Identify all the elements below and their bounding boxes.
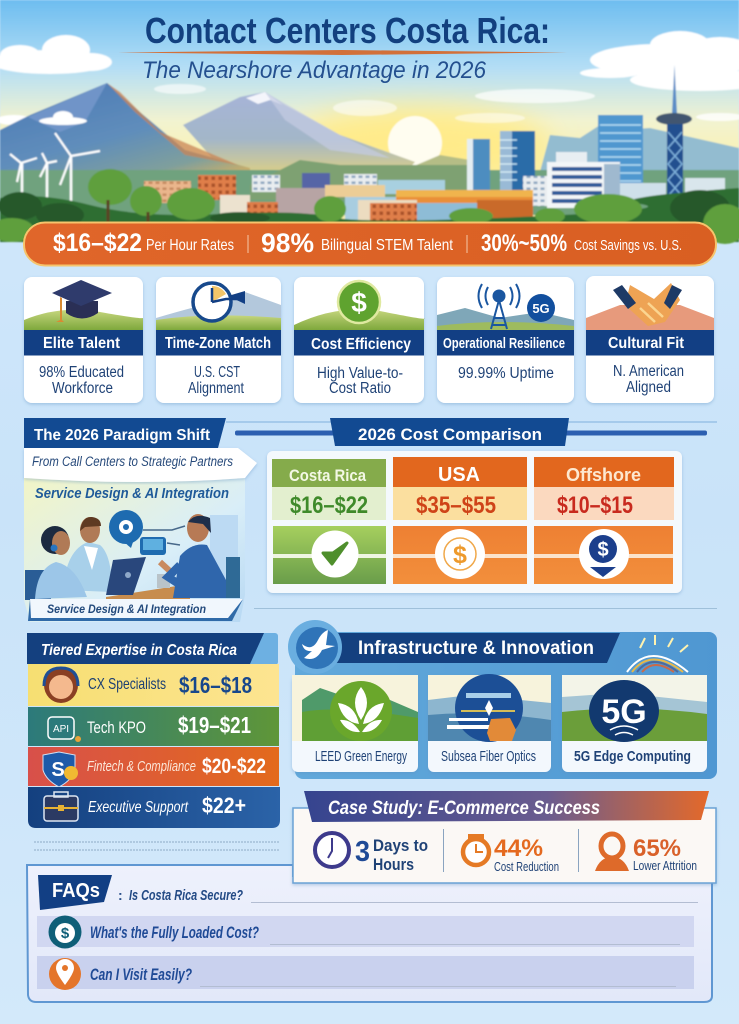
heading: paradigm shift (24, 418, 226, 448)
metric: days to hours: Hours (373, 855, 414, 874)
illustration panel: service design and AI: Service Design & AI Integration (35, 485, 229, 502)
icon: gear speech bubble (109, 510, 143, 548)
question: visit: Can I Visit Easily? (90, 965, 192, 984)
question: fully loaded cost: What's the Fully Loaded Cost? (90, 923, 259, 942)
panel: paradigm shift (24, 418, 257, 622)
key statistics banner: $16–$22 (53, 229, 142, 257)
card: Subsea Fiber Optics: Subsea Fiber Optics (441, 749, 536, 765)
question: fully loaded cost: $ (61, 925, 70, 942)
panel: infrastructure and innovation (288, 620, 717, 779)
icon: 5G badge (589, 680, 659, 742)
heading: cost comparison: 2026 Cost Comparison (358, 425, 542, 444)
tier: Tech KPO (28, 707, 279, 746)
subtitle: The Nearshore Advantage in 2026 (142, 57, 487, 84)
card: 5G Edge Computing (562, 675, 707, 772)
card: Cultural Fit (586, 276, 714, 403)
icon: rainbow arc (627, 635, 688, 672)
column: Costa Rica (272, 459, 386, 584)
column: Costa Rica: Costa Rica (289, 466, 366, 485)
caption strip (28, 599, 243, 621)
card: Cultural Fit: N. American (613, 363, 684, 380)
card: Time-Zone Match (156, 277, 281, 403)
metric: days to hours (315, 833, 428, 874)
metric: cost reduction: Cost Reduction (494, 859, 559, 874)
card: 5G Edge Computing: 5G Edge Computing (574, 749, 691, 765)
FAQ heading tag (38, 875, 112, 910)
tier: Fintech and Compliance: $20-$22 (202, 755, 266, 778)
card: Cost Efficiency: High Value-to- (317, 365, 403, 382)
card: Elite Talent: 98% Educated (39, 364, 124, 381)
question: security (118, 887, 698, 904)
card: Time-Zone Match: Alignment (188, 380, 245, 397)
icon: handshake (613, 283, 682, 326)
card: Subsea Fiber Optics (428, 674, 551, 772)
tier: Tech KPO: $19–$21 (178, 712, 251, 738)
tier: Tech KPO: API (53, 724, 69, 735)
infrastructure heading: Infrastructure & Innovation (358, 638, 594, 659)
column: Offshore: $10–$15 (557, 492, 633, 519)
metric: days to hours: 3 (355, 836, 370, 868)
tier: Executive Support (28, 787, 280, 828)
card: LEED Green Energy (292, 675, 418, 772)
metric: lower attrition (595, 834, 697, 873)
card: Time-Zone Match: U.S. CST (194, 364, 240, 381)
key statistics banner: Bilingual STEM Talent (321, 237, 453, 254)
panel: tiered expertise (27, 633, 280, 828)
card: LEED Green Energy: LEED Green Energy (315, 749, 408, 765)
key statistics banner: 30%~50% (481, 230, 567, 257)
person: agent with headset (35, 526, 87, 599)
icon: laptop (106, 557, 146, 595)
icon: dollar coin: $ (453, 541, 467, 569)
card: Elite Talent (24, 277, 143, 403)
case study banner: Case Study: E-Commerce Success (328, 798, 600, 819)
tier heading (27, 633, 278, 665)
tier: CX Specialists: $16–$18 (179, 672, 252, 698)
icon: dollar coin: $ (351, 287, 367, 318)
tier: Executive Support: $22+ (202, 793, 246, 818)
key statistics banner: Cost Savings vs. U.S. (574, 237, 682, 254)
panel: case study (293, 791, 716, 883)
icon: graduation cap (52, 280, 112, 322)
column: USA: USA (438, 464, 480, 486)
heading: cost comparison (235, 418, 707, 446)
case study banner (304, 791, 709, 822)
column: Costa Rica: $16–$22 (290, 492, 368, 519)
key statistics banner: 98% (261, 228, 314, 258)
card: Operational Resilience: 99.99% Uptime (458, 365, 554, 382)
icon: fiber globe (447, 674, 523, 742)
icon: clock (193, 283, 245, 321)
question: security: Is Costa Rica Secure? (129, 888, 243, 904)
tier heading: Tiered Expertise in Costa Rica (41, 642, 237, 659)
icon: dollar down: $ (597, 539, 609, 561)
metric: lower attrition: Lower Attrition (633, 858, 697, 873)
column: Offshore: Offshore (566, 465, 641, 485)
tier: Fintech and Compliance: Fintech & Compliance (87, 758, 196, 775)
card: Cost Efficiency: Cost Efficiency (311, 336, 411, 353)
tier: CX Specialists (28, 664, 279, 706)
card: Elite Talent: Workforce (52, 380, 113, 397)
card: Operational Resilience: Operational Resilience (443, 336, 565, 352)
column: USA (393, 457, 527, 584)
tier: Executive Support: Executive Support (88, 799, 188, 816)
illustration panel: service design and AI (24, 470, 245, 622)
caption strip: Service Design & AI Integration (47, 602, 206, 616)
key statistics banner: Per Hour Rates (146, 237, 234, 254)
title: Contact Centers Costa Rica: (145, 10, 550, 51)
cost comparison table (267, 451, 682, 593)
person: colleague (63, 517, 112, 592)
key statistics banner (24, 222, 716, 266)
icon: check mark (312, 530, 358, 578)
arrow banner: from call centers (24, 448, 257, 482)
question: visit (37, 956, 694, 990)
icon: bird badge (288, 620, 342, 674)
question: security: : (118, 887, 123, 903)
question: fully loaded cost (37, 916, 694, 948)
infrastructure heading (330, 633, 620, 663)
metric: cost reduction: 44% (494, 835, 543, 862)
card: Cultural Fit: Cultural Fit (608, 335, 685, 352)
icon: leaf (330, 681, 392, 741)
column: Offshore (534, 457, 674, 584)
heading: paradigm shift: The 2026 Paradigm Shift (34, 427, 210, 444)
card: Cultural Fit: Aligned (626, 379, 671, 396)
tier: Fintech and Compliance: S (51, 759, 65, 781)
arrow banner: from call centers: From Call Centers to Strategic Partners (32, 454, 233, 469)
card: Cost Efficiency: Cost Ratio (329, 380, 391, 397)
panel: FAQs (27, 865, 712, 1002)
card: Operational Resilience (437, 277, 574, 403)
tier: Fintech and Compliance (28, 747, 279, 787)
icon: tablet device (140, 526, 185, 555)
card: Cost Efficiency (294, 277, 425, 403)
column: USA: $35–$55 (416, 492, 496, 519)
tier: Tech KPO: Tech KPO (87, 718, 146, 737)
person: consultant (160, 514, 226, 598)
icon: signal tower with 5G: 5G (532, 301, 550, 316)
hero scene: mountains and skyline (0, 0, 739, 244)
metric: cost reduction (463, 834, 559, 874)
metric: days to hours: Days to (373, 836, 428, 855)
card: Elite Talent: Elite Talent (43, 335, 121, 352)
icon: 5G badge: 5G (601, 693, 647, 731)
tier: CX Specialists: CX Specialists (88, 676, 166, 693)
title (118, 10, 567, 84)
FAQ heading tag: FAQs (52, 880, 100, 902)
metric: lower attrition: 65% (633, 835, 681, 862)
card: Time-Zone Match: Time-Zone Match (165, 335, 271, 352)
